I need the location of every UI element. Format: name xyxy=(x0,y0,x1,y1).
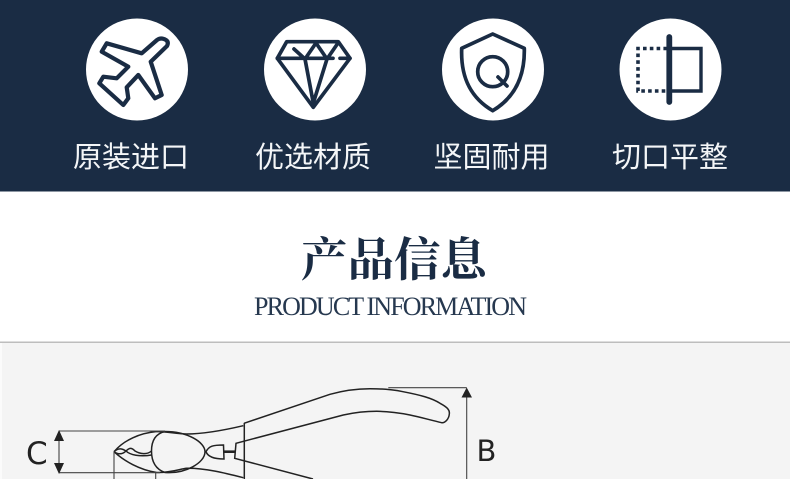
icon: cut line xyxy=(638,37,701,102)
dimension C xyxy=(26,430,165,479)
label: B: B xyxy=(476,434,496,468)
feature: durable xyxy=(433,18,550,174)
diagram: pliers outline xyxy=(114,389,449,479)
header band xyxy=(0,0,790,192)
icon: quality shield xyxy=(462,34,524,111)
icon: airplane xyxy=(99,38,168,105)
dimension B xyxy=(388,388,496,479)
label: C: C xyxy=(26,436,48,472)
label: 原装进口: 原装进口 xyxy=(73,141,189,174)
panel: dimension drawing xyxy=(0,342,790,479)
heading: 产品信息: 产品信息 xyxy=(301,235,490,287)
feature: selected material xyxy=(255,18,371,174)
feature: imported xyxy=(73,18,189,174)
icon: diamond xyxy=(277,42,350,107)
label: 坚固耐用: 坚固耐用 xyxy=(433,141,550,174)
subheading: product information: PRODUCT INFORMATION xyxy=(254,292,527,321)
feature: flat cut xyxy=(612,18,728,174)
label: 切口平整: 切口平整 xyxy=(612,141,728,174)
label: 优选材质: 优选材质 xyxy=(255,141,371,174)
